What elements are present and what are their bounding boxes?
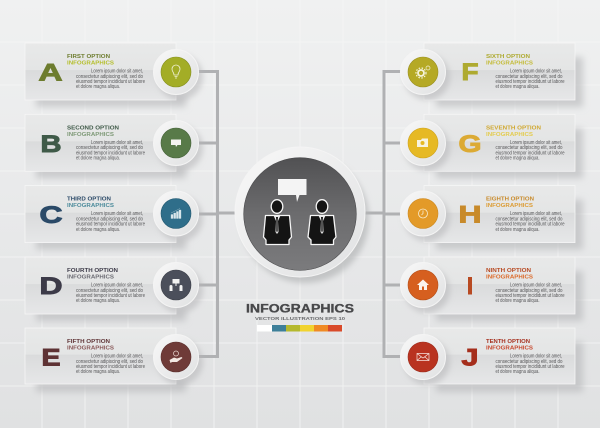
- panel D: fourth option: [25, 257, 186, 321]
- panel G: seventh option: et dolore magna aliqua.: [496, 156, 540, 162]
- panel D: fourth option: D: [40, 273, 62, 300]
- badge H: clock: [400, 191, 450, 242]
- panel F: sixth option: INFOGRAPHICS: [486, 60, 534, 66]
- panel J: tenth option: consectetur adipiscing elit, sed do: [496, 359, 563, 365]
- panel C: third option: C: [40, 202, 63, 229]
- panel F: sixth option: eiusmod tempor incididunt ut labore: [496, 79, 565, 85]
- panel J: tenth option: Lorem ipsum dolor sit amet,: [510, 354, 562, 360]
- panel I: ninth option: I: [467, 273, 473, 300]
- central circle with two business people: [235, 147, 369, 283]
- connector: right tree: [360, 72, 404, 356]
- panel B: second option: et dolore magna aliqua.: [76, 156, 120, 162]
- panel I: ninth option: eiusmod tempor incididunt ut labore: [496, 293, 565, 299]
- panel H: eighth option: consectetur adipiscing elit, sed do: [496, 216, 563, 222]
- panel J: tenth option: eiusmod tempor incididunt ut labore: [496, 364, 565, 370]
- panel D: fourth option: Lorem ipsum dolor sit amet,: [91, 282, 143, 288]
- badge B: speech bubble: [154, 120, 203, 171]
- panel B: second option: [25, 114, 186, 178]
- panel I: ninth option: INFOGRAPHICS: [486, 274, 534, 280]
- panel A: first option: A: [38, 60, 63, 86]
- panel G: seventh option: eiusmod tempor incididunt ut labore: [496, 150, 565, 156]
- panel E: fifth option: Lorem ipsum dolor sit amet,: [91, 354, 143, 360]
- badge F: gears: [400, 50, 450, 100]
- panel H: eighth option: H: [458, 202, 482, 229]
- panel F: sixth option: et dolore magna aliqua.: [496, 84, 540, 90]
- panel C: third option: et dolore magna aliqua.: [76, 227, 120, 233]
- panel E: fifth option: [25, 328, 186, 392]
- panel G: seventh option: Lorem ipsum dolor sit amet,: [510, 140, 562, 146]
- panel C: third option: THIRD OPTION: [67, 197, 111, 203]
- panel I: ninth option: [424, 257, 583, 321]
- panel A: first option: FIRST OPTION: [67, 54, 110, 60]
- panel G: seventh option: SEVENTH OPTION: [486, 125, 541, 131]
- panel A: first option: [25, 43, 186, 107]
- panel F: sixth option: consectetur adipiscing elit, sed do: [496, 74, 563, 80]
- panel G: seventh option: consectetur adipiscing elit, sed do: [496, 145, 563, 151]
- panel J: tenth option: J: [462, 344, 478, 372]
- panel F: sixth option: F: [462, 59, 479, 86]
- panel C: third option: eiusmod tempor incididunt ut labore: [76, 222, 145, 228]
- panel J: tenth option: et dolore magna aliqua.: [496, 369, 540, 375]
- panel D: fourth option: consectetur adipiscing elit, sed do: [76, 288, 143, 294]
- panel C: third option: [25, 186, 186, 250]
- badge C: growth chart: [154, 191, 203, 242]
- panel F: sixth option: Lorem ipsum dolor sit amet,: [510, 68, 562, 74]
- panel H: eighth option: EIGHTH OPTION: [486, 197, 534, 203]
- panel D: fourth option: et dolore magna aliqua.: [76, 298, 120, 304]
- colour legend bar: [257, 325, 342, 332]
- panel J: tenth option: INFOGRAPHICS: [486, 346, 534, 352]
- panel G: seventh option: INFOGRAPHICS: [486, 132, 534, 138]
- badge D: org chart: [154, 262, 203, 313]
- panel D: fourth option: FOURTH OPTION: [67, 268, 118, 274]
- panel I: ninth option: NINTH OPTION: [486, 268, 531, 274]
- panel B: second option: SECOND OPTION: [67, 125, 119, 131]
- panel E: fifth option: INFOGRAPHICS: [67, 346, 115, 352]
- panel E: fifth option: et dolore magna aliqua.: [76, 369, 120, 375]
- panel C: third option: INFOGRAPHICS: [67, 203, 115, 209]
- panel H: eighth option: [424, 186, 583, 250]
- connector: left tree: [196, 72, 240, 356]
- person left: [264, 200, 336, 244]
- panel B: second option: consectetur adipiscing elit, sed do: [76, 145, 143, 151]
- panel E: fifth option: eiusmod tempor incididunt ut labore: [76, 364, 145, 370]
- panel A: first option: eiusmod tempor incididunt ut labore: [76, 79, 145, 85]
- panel G: seventh option: [424, 114, 583, 178]
- panel B: second option: Lorem ipsum dolor sit amet,: [91, 140, 143, 146]
- panel H: eighth option: et dolore magna aliqua.: [496, 227, 540, 233]
- person right: [316, 200, 328, 213]
- panel E: fifth option: consectetur adipiscing elit, sed do: [76, 359, 143, 365]
- badge J: envelope: [400, 334, 450, 385]
- panel I: ninth option: Lorem ipsum dolor sit amet,: [510, 282, 562, 288]
- panel C: third option: Lorem ipsum dolor sit amet,: [91, 211, 143, 217]
- panel J: tenth option: TENTH OPTION: [486, 339, 530, 345]
- badge A: light bulb: [154, 50, 203, 100]
- panel B: second option: B: [40, 131, 62, 158]
- badge E: hand with coin: [154, 334, 203, 385]
- panel H: eighth option: INFOGRAPHICS: [486, 203, 534, 209]
- panel F: sixth option: SIXTH OPTION: [486, 54, 530, 60]
- panel E: fifth option: FIFTH OPTION: [67, 339, 110, 345]
- panel B: second option: eiusmod tempor incididunt ut labore: [76, 150, 145, 156]
- speech bubble: [278, 179, 306, 202]
- panel C: third option: consectetur adipiscing elit, sed do: [76, 216, 143, 222]
- subtitle: VECTOR ILLUSTRATION EPS 10: [255, 316, 346, 321]
- panel J: tenth option: [424, 328, 583, 392]
- panel I: ninth option: et dolore magna aliqua.: [496, 298, 540, 304]
- panel A: first option: et dolore magna aliqua.: [76, 84, 120, 90]
- panel B: second option: INFOGRAPHICS: [67, 132, 115, 138]
- badge I: house: [400, 262, 450, 313]
- badge G: camera: [400, 120, 450, 171]
- panel I: ninth option: consectetur adipiscing elit, sed do: [496, 288, 563, 294]
- panel A: first option: consectetur adipiscing elit, sed do: [76, 74, 143, 80]
- panel H: eighth option: Lorem ipsum dolor sit amet,: [510, 211, 562, 217]
- panel E: fifth option: E: [42, 344, 60, 372]
- panel A: first option: Lorem ipsum dolor sit amet,: [91, 68, 143, 74]
- panel F: sixth option: [424, 43, 583, 107]
- panel D: fourth option: INFOGRAPHICS: [67, 274, 115, 280]
- panel A: first option: INFOGRAPHICS: [67, 60, 115, 66]
- panel G: seventh option: G: [458, 131, 482, 158]
- panel D: fourth option: eiusmod tempor incididunt ut labore: [76, 293, 145, 299]
- panel H: eighth option: eiusmod tempor incididunt ut labore: [496, 222, 565, 228]
- title: INFOGRAPHICS: [246, 304, 354, 316]
